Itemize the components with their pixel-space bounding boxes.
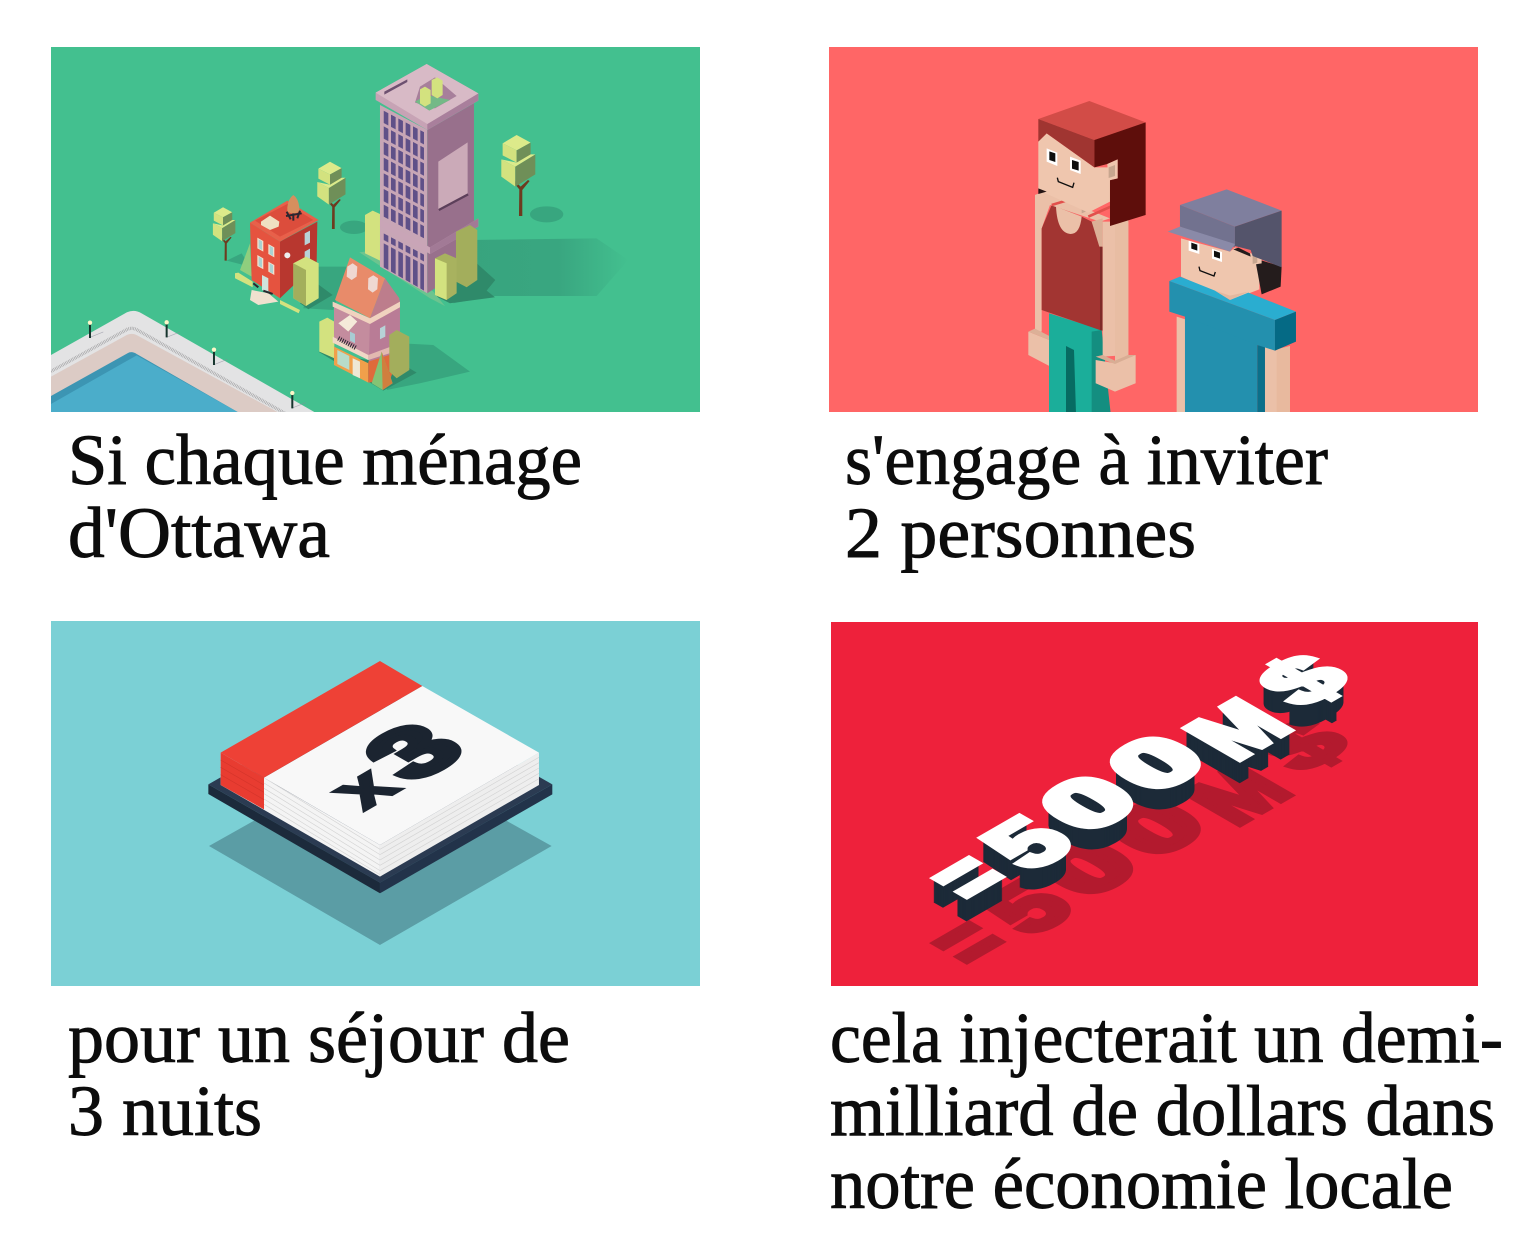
tower	[376, 64, 478, 293]
caption: cela injecterait un demi-milliard de dollars dans notre économie locale: milliard de dollars dans	[830, 1071, 1495, 1151]
calendar number x3: 3	[340, 709, 487, 794]
caption: Si chaque ménage d'Ottawa	[68, 420, 582, 573]
calendar number x3	[309, 709, 487, 818]
lamp posts	[88, 320, 306, 408]
panel: two people on coral	[829, 47, 1478, 412]
big extruded number =500 M$	[898, 641, 1371, 922]
trees	[213, 135, 535, 261]
panel: city buildings on green	[51, 47, 700, 412]
tower shadow	[453, 238, 628, 303]
caption: pour un séjour de 3 nuits: 3 nuits	[68, 1071, 262, 1151]
panel: 500 M$ on red: $	[1236, 641, 1371, 719]
river embankment	[51, 311, 317, 413]
caption: pour un séjour de 3 nuits	[68, 998, 570, 1151]
panel: 500 M$ on red: $	[1236, 706, 1371, 784]
panel: 500 M$ on red	[831, 622, 1478, 986]
ground shadow of the number: =	[898, 902, 1037, 982]
panel: 500 M$ on red: 5	[961, 869, 1096, 947]
caption: pour un séjour de 3 nuits: pour un séjour de	[68, 998, 570, 1078]
panel: 500 M$ on red: 0	[1085, 787, 1228, 870]
house	[319, 257, 409, 390]
caption: Si chaque ménage d'Ottawa: d'Ottawa	[68, 493, 330, 573]
caption: s'engage à inviter 2 personnes: s'engage à inviter	[845, 420, 1328, 500]
caption: Si chaque ménage d'Ottawa: Si chaque ménage	[68, 420, 582, 500]
panel: calendar on teal	[51, 621, 700, 986]
big extruded number =500 M$: =	[898, 837, 1037, 917]
caption: s'engage à inviter 2 personnes	[845, 420, 1328, 573]
panel: 500 M$ on red: 0	[1017, 762, 1161, 845]
woman	[1028, 101, 1146, 413]
caption: s'engage à inviter 2 personnes: 2 personnes	[845, 493, 1196, 573]
panel: 500 M$ on red: 0	[1085, 722, 1228, 805]
panel: 500 M$ on red: M	[1165, 753, 1311, 837]
icon: calendar	[208, 661, 552, 945]
tree shadows	[530, 206, 563, 222]
panel: 500 M$ on red: 0	[1017, 827, 1161, 910]
tower hedges	[365, 211, 477, 300]
ground shadow of the number	[898, 706, 1371, 982]
house shadow	[387, 343, 470, 390]
caption: cela injecterait un demi-milliard de dollars dans notre économie locale: cela injecterait un demi-	[830, 998, 1503, 1078]
illustration	[213, 64, 628, 391]
red building	[235, 195, 319, 313]
caption: cela injecterait un demi-milliard de dollars dans notre économie locale: notre économie locale	[830, 1144, 1453, 1224]
panel: 500 M$ on red: 5	[961, 804, 1096, 882]
boy	[1168, 189, 1296, 413]
calendar number x3: x	[309, 757, 416, 818]
panel: 500 M$ on red: M	[1165, 688, 1311, 772]
